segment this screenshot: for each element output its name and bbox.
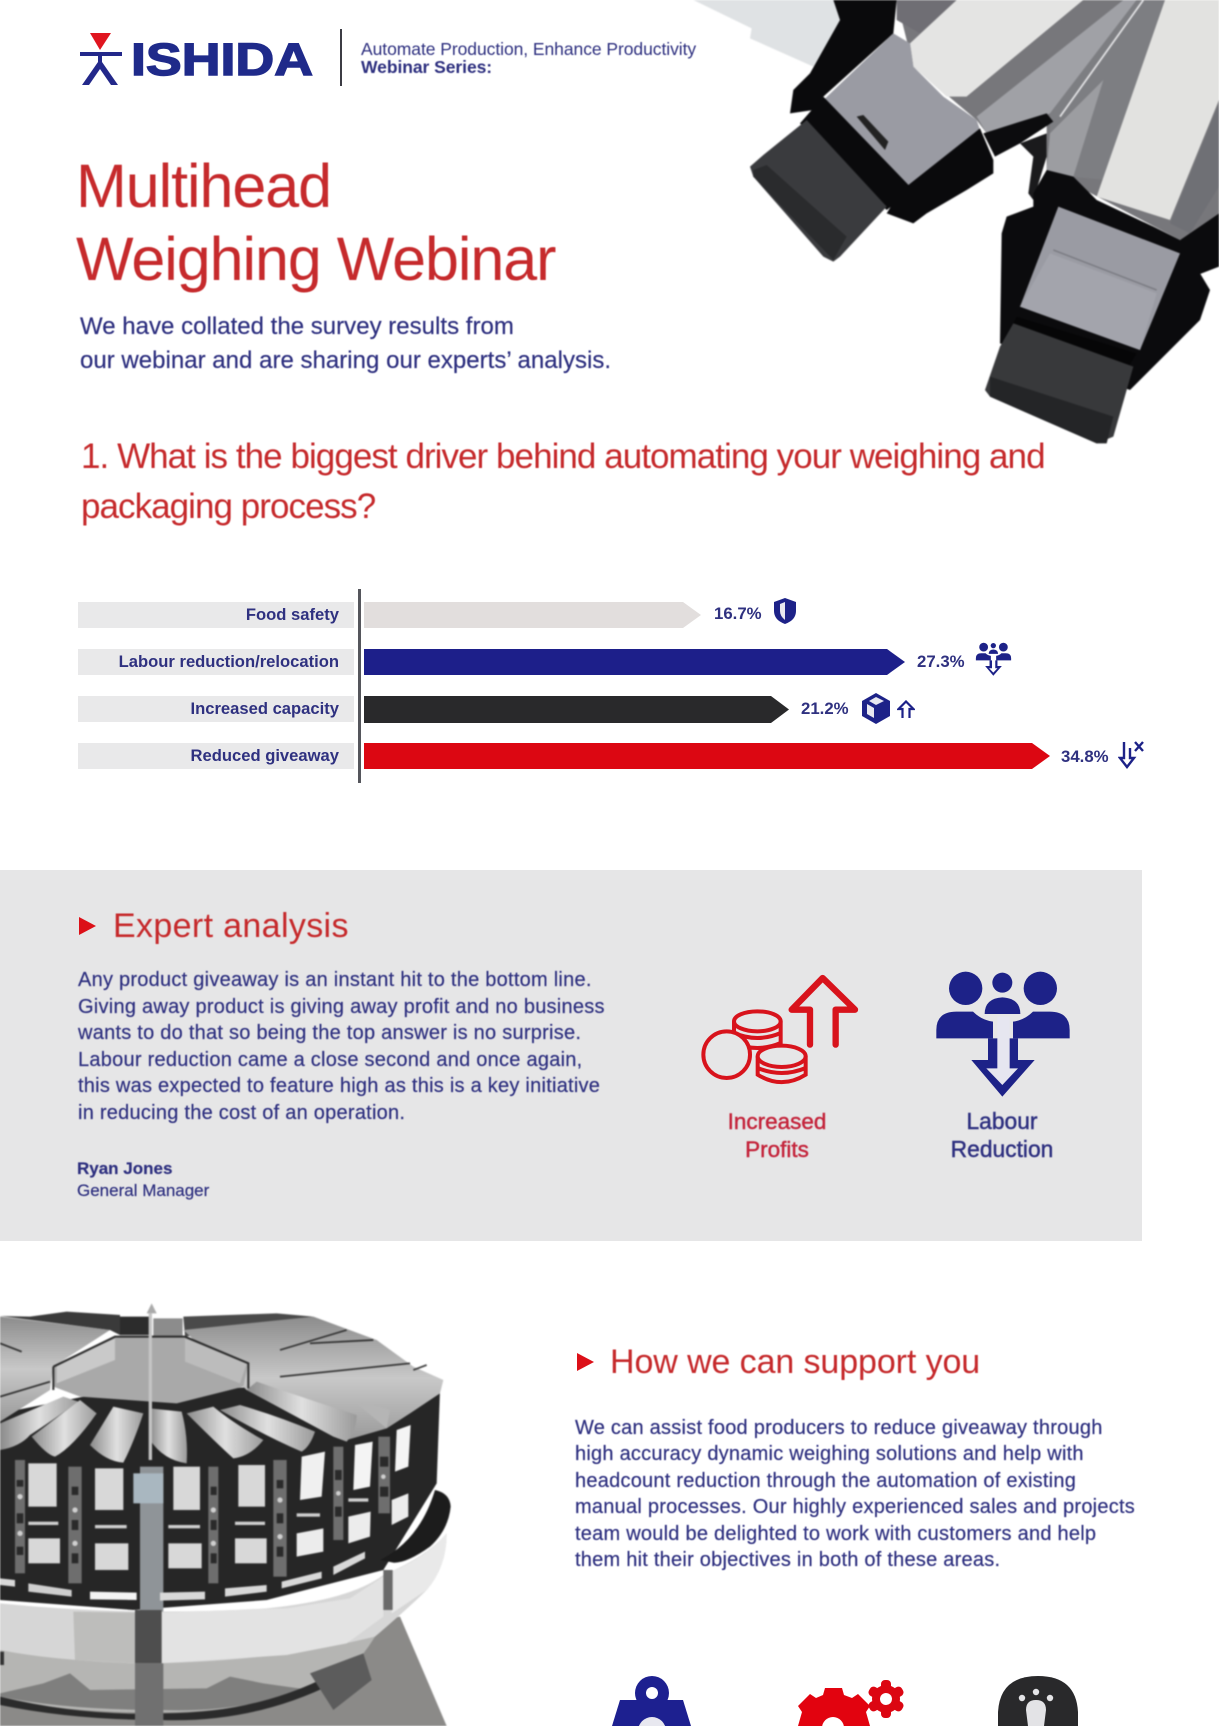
logo divider bbox=[340, 29, 342, 86]
support text bbox=[574, 1417, 1135, 1571]
title: Weighing Webinar bbox=[76, 225, 555, 293]
support text: manual processes. Our highly experienced sales and projects bbox=[575, 1496, 1135, 1518]
support text: them hit their objectives in both of these areas. bbox=[575, 1549, 1000, 1571]
label: increased profits bbox=[728, 1109, 826, 1162]
bar: increased capacity bbox=[364, 696, 789, 723]
icon: giveaway arrow with x bbox=[1118, 741, 1144, 769]
heading marker bbox=[79, 917, 96, 935]
tagline bbox=[360, 39, 697, 77]
analysis text bbox=[77, 969, 605, 1124]
bar chart bbox=[78, 589, 1144, 783]
attribution: Ryan Jones bbox=[77, 1159, 172, 1178]
bar: food safety bbox=[364, 602, 701, 628]
analysis text: this was expected to feature high as this is a key initiative bbox=[78, 1075, 600, 1097]
logo: Ishida: ISHIDA bbox=[131, 34, 313, 85]
analysis text: Labour reduction came a close second and once again, bbox=[78, 1048, 582, 1070]
title: Multihead bbox=[76, 152, 331, 220]
support text: headcount reduction through the automation of existing bbox=[575, 1470, 1076, 1492]
row: increased capacity label: Increased capacity bbox=[190, 699, 339, 718]
row: food safety label: Food safety bbox=[246, 605, 339, 624]
row: reduced giveaway label bbox=[78, 743, 354, 769]
icon: labour reduction bbox=[936, 972, 1070, 1097]
intro text bbox=[79, 313, 611, 374]
analysis text: Giving away product is giving away profit and no business bbox=[78, 996, 605, 1018]
value: 16.7%: 16.7% bbox=[714, 604, 762, 623]
attribution bbox=[77, 1159, 210, 1200]
icon: up arrow bbox=[897, 700, 915, 718]
icon: people with down arrow bbox=[976, 642, 1012, 676]
label: labour reduction: Reduction bbox=[951, 1136, 1053, 1162]
image: multihead weigher machine bbox=[0, 1303, 452, 1726]
icon: increased profits bbox=[701, 974, 858, 1084]
bar: labour reduction bbox=[364, 649, 905, 675]
row: labour reduction label: Labour reduction/relocation bbox=[119, 652, 339, 671]
intro text: our webinar and are sharing our experts’ analysis. bbox=[80, 347, 611, 374]
question heading bbox=[81, 437, 1045, 526]
tagline: Automate Production, Enhance Productivity bbox=[361, 39, 696, 59]
label: increased profits: Increased bbox=[728, 1109, 826, 1134]
question heading: packaging process? bbox=[81, 487, 375, 526]
icon: box bbox=[862, 693, 890, 724]
question heading: 1. What is the biggest driver behind automating your weighing and bbox=[81, 437, 1045, 476]
icon: gears bbox=[798, 1680, 904, 1726]
analysis text: Any product giveaway is an instant hit to the bottom line. bbox=[78, 969, 592, 991]
analysis text: in reducing the cost of an operation. bbox=[78, 1102, 405, 1124]
title bbox=[76, 152, 556, 294]
value: 21.2%: 21.2% bbox=[801, 699, 849, 718]
logo: Ishida bbox=[80, 33, 313, 85]
row: reduced giveaway label: Reduced giveaway bbox=[190, 746, 339, 765]
heading marker bbox=[577, 1353, 594, 1371]
row: food safety label bbox=[78, 602, 354, 628]
chart axis bbox=[358, 589, 360, 783]
value: 27.3%: 27.3% bbox=[917, 652, 965, 671]
bar: reduced giveaway bbox=[364, 743, 1050, 769]
icon: shield bbox=[774, 598, 796, 624]
support text: team would be delighted to work with customers and help bbox=[575, 1523, 1096, 1545]
support text: high accuracy dynamic weighing solutions and help with bbox=[575, 1443, 1084, 1465]
analysis text: wants to do that so being the top answer is no surprise. bbox=[78, 1022, 581, 1044]
panel: expert analysis bbox=[0, 870, 1142, 1241]
row: increased capacity label bbox=[78, 696, 354, 722]
row: labour reduction label bbox=[78, 649, 354, 675]
image: multihead weigher chutes, top right bbox=[694, 0, 1219, 444]
icon: weight bbox=[612, 1676, 691, 1726]
intro text: We have collated the survey results from bbox=[80, 313, 514, 340]
attribution: General Manager bbox=[77, 1181, 209, 1200]
label: labour reduction bbox=[951, 1108, 1053, 1162]
heading: how we can support you: How we can support you bbox=[610, 1343, 980, 1381]
tagline: Webinar Series: bbox=[361, 57, 492, 77]
label: increased profits: Profits bbox=[745, 1136, 809, 1162]
label: labour reduction: Labour bbox=[966, 1108, 1037, 1134]
support text: We can assist food producers to reduce giveaway through bbox=[575, 1417, 1103, 1439]
icon: head with lightbulb bbox=[998, 1676, 1078, 1726]
heading: expert analysis: Expert analysis bbox=[113, 907, 349, 945]
value: 34.8%: 34.8% bbox=[1061, 747, 1109, 766]
